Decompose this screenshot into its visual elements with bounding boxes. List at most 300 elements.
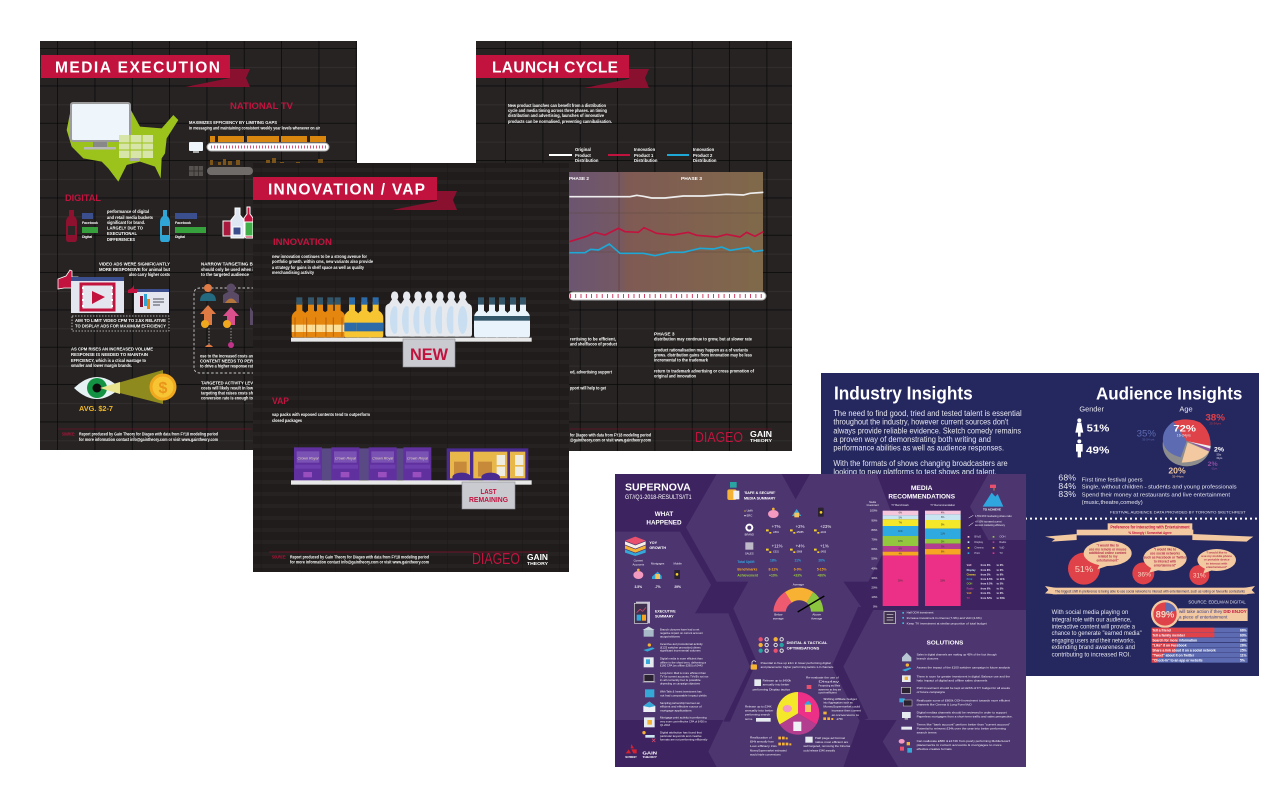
logo: gain theory: GAIN (642, 751, 657, 757)
pie chart annotations: Shifting Affiliate budget (823, 697, 857, 701)
bubble: 31 percent: to interact with (1206, 561, 1227, 565)
media change table: to 6% (997, 569, 1004, 572)
media summary table: +23% (820, 524, 831, 529)
executive summary list: in all currently but is possible (660, 678, 701, 682)
stacked bar chart: media investment: 5% (941, 541, 944, 543)
media summary table: +10% (769, 574, 778, 578)
text: national tv summary: MAXIMIZES EFFICIENCY BY LIMITING GAPS (189, 120, 277, 125)
pie chart annotations: into Aggregators such as (823, 701, 853, 705)
text: vap body (272, 412, 370, 423)
achieve targets: account marketing efficiency (975, 524, 1006, 527)
text: innovation body: a strategy for gains in shelf space as well as quality (272, 265, 364, 270)
solutions list: of future campaigns (917, 690, 946, 694)
media summary table: +2% (796, 524, 805, 529)
age pie chart: 16-24yrs (1177, 434, 1191, 438)
optimisation callout: and placements: higher performing tactics 1-3 channels (761, 665, 834, 669)
executive summary list: TV for current accounts; TVs/Ev not run (660, 675, 709, 679)
chart legend: Product 1 (634, 153, 654, 158)
bar chart: actions taken: Share a link about it on a social network (1152, 649, 1216, 653)
ribbon: preference heading: % Strongly / Somewhat Agree (1128, 530, 1172, 535)
ribbon: biggest shift statement (1045, 586, 1255, 594)
new tag: NEW (410, 345, 449, 364)
audience stats: Single, without children - students and young professionals (1082, 485, 1237, 491)
icon: yoy stack (625, 537, 646, 556)
pie chart annotations: Display (818, 680, 841, 684)
text: industry body: a proven way of demonstrating both writing and (833, 435, 991, 444)
heading: what happened: HAPPENED (646, 520, 682, 527)
stacked bar chart: media investment: 10% (898, 541, 903, 543)
icon: eye and coin (74, 370, 176, 404)
media change table: OOH (967, 583, 973, 586)
achieve targets: +8-10% increased current (975, 521, 1002, 524)
gauge chart: Average (811, 617, 823, 621)
logo: gain theory: THEORY (527, 561, 549, 567)
achieve targets: 1.5% ROI marketing share ratio (975, 515, 1012, 518)
executive summary list: Branch closures have had a net (660, 628, 700, 632)
phase text columns: product rationalisation may happen as a of variants (654, 348, 748, 352)
panel: launch cycle (476, 41, 792, 451)
heading: executive summary: EXECUTIVE (655, 609, 676, 613)
text: industry body: The need to find good, tried and tested talent is essential (833, 409, 1022, 418)
text: industry body: always provide reliable evidence. Sketch comedy remains (833, 426, 1021, 435)
executive summary list: Digital attribution has found that (660, 731, 702, 735)
age pie chart: 2% (1214, 448, 1225, 454)
yoy growth: 3.5% (635, 585, 642, 589)
icon: display ad card (128, 285, 169, 313)
bubble: 36 percent: "I would like to (1154, 548, 1176, 552)
pie chart annotations (745, 676, 861, 757)
audience stats: First time festival goers (1082, 477, 1143, 483)
icon: digital optimisation dots (759, 638, 783, 652)
media summary table: ERC (747, 513, 752, 517)
age pie chart: 38% (1205, 413, 1226, 423)
bubble: 36 percent: use social networks (1150, 552, 1180, 556)
executive summary list (642, 627, 709, 742)
executive summary list: significant incremental volumes (660, 649, 701, 653)
pie chart annotations: Re-evaluate the use of (806, 676, 839, 680)
stacked bar chart: media investment: 4% (899, 554, 902, 556)
executive summary list: formats are not performing efficiently (660, 738, 708, 742)
text: innovation body: merchandising activity (272, 270, 314, 275)
callout: aim to limit video cpm: TO DISPLAY ADS FOR MAXIMUM EFFICIENCY (75, 324, 167, 328)
line chart: distribution over phases: PHASE 2 (569, 176, 589, 181)
bubble: 36 percent: to interact with (1154, 560, 1176, 564)
stacked bar chart: media investment: 5% (941, 546, 944, 548)
media summary table: £331 (773, 550, 779, 553)
purple packs: Crown Royal (298, 456, 319, 460)
phase text columns: ed, advertising support (570, 370, 612, 374)
gauge chart (773, 582, 824, 621)
text: launch intro (508, 103, 612, 124)
bubble: 31 percent: 31% (1193, 572, 1206, 579)
heading: media recommendations (888, 485, 955, 500)
stacked bar chart: media investment: 53% (940, 581, 945, 583)
pie chart annotations: £84k annually from (750, 740, 775, 744)
heading: vap: VAP (272, 396, 289, 406)
logo: gain theory (527, 553, 549, 567)
source note: FESTIVAL AUDIENCE DATA PROVIDED BY TORONTO SKETCHFEST (1110, 509, 1246, 514)
background hexagons (615, 474, 1026, 767)
media summary table: Uplift (747, 509, 753, 513)
media change table: TV (967, 597, 970, 600)
audience stats: 83% (1058, 489, 1076, 499)
heading: digital and tactical optimisations: OPTIMISATIONS (787, 646, 820, 650)
heading: what happened (646, 511, 682, 527)
icon and heading: to achieve: TO ACHIEVE (983, 508, 1001, 512)
yoy growth (633, 541, 682, 589)
pie chart annotations: performing search (745, 713, 771, 717)
media summary table: Total Uplift (737, 560, 755, 564)
text: digital performance: DIFFERENCES (107, 237, 135, 242)
heading: media recommendations: MEDIA (911, 485, 933, 492)
bar chart: actions taken: Tell a friend (1152, 628, 1171, 632)
bubble: 31 percent: use my mobile phone (1201, 554, 1232, 558)
age pie chart: 2% (1208, 462, 1218, 468)
bubble: 36 percent (1132, 546, 1187, 584)
heading: industry insights: Industry Insights (834, 382, 973, 403)
executive summary list: acquisitions (660, 634, 681, 638)
pie chart annotations: Release up to £34K (745, 704, 772, 708)
89 percent callout: a piece of entertainment (1179, 614, 1228, 619)
icon: bottle cluster (223, 207, 253, 238)
yoy growth: 29% (674, 585, 681, 589)
age pie chart: 64yrs (1217, 457, 1223, 460)
solutions list: Terms like "bank account" perform better than "current account" (917, 723, 1010, 727)
heading: digital: DIGITAL (65, 193, 101, 204)
media summary table: £102 (821, 531, 827, 534)
chart legend: Original (575, 147, 591, 152)
ribbon: launch cycle heading (476, 55, 649, 88)
callout: aim to limit video cpm: AIM TO LIMIT VIDEO CPM TO 2.5X RELATIVE (75, 318, 166, 323)
launch footer and logos: THEORY (750, 438, 773, 444)
media change table: VoD (967, 592, 972, 595)
media summary table: £591 (773, 531, 779, 534)
media summary table: 20% (818, 559, 825, 563)
stacked bar chart: media investment: 9% (941, 524, 944, 526)
pie chart annotations: terms (745, 717, 753, 721)
audience stats: 68% (1058, 473, 1076, 483)
pie chart annotations: native most efficient are (815, 740, 849, 744)
stacked bar chart: media investment: Media (869, 501, 877, 504)
ribbon: media execution heading (41, 55, 250, 87)
icon: safe and secure (727, 482, 739, 500)
panel: media execution (40, 41, 357, 450)
media legend: Cinema (974, 546, 984, 550)
bar chart: actions taken: 28% (1240, 638, 1247, 642)
bar chart: actions taken: 25% (1240, 649, 1247, 653)
stacked bar chart: media investment: 6% (899, 549, 902, 551)
targeting text: costs will likely result in low (201, 386, 254, 390)
media change table: to 3% (997, 564, 1004, 567)
audience stats: Spend their money at restaurants and live entertainment (1082, 493, 1230, 499)
text: industry body: throughout the industry, however current sources don't (833, 418, 1009, 427)
media summary table: +1% (820, 543, 829, 548)
ribbon: launch cycle heading: LAUNCH CYCLE (492, 60, 618, 76)
solutions list: effective creative formats (917, 747, 952, 751)
89 percent callout: 89% (1156, 609, 1175, 619)
executive summary list: (£125 switcher promotion) drives (660, 645, 701, 649)
solutions list: There is room for greater investment in digital. Balance use and the (917, 674, 1011, 678)
targeting text: targeting that raises costs sh (201, 390, 253, 396)
pie chart annotations: MoneySupermarket could (823, 704, 861, 708)
chart legend: Distribution (693, 158, 717, 163)
stacked bar chart: media investment: 60% (871, 547, 878, 551)
solutions list: PoD investment should be kept at LESS of FY budget for all weeks (917, 686, 1011, 690)
ribbon: biggest shift statement: The biggest shift in preference is being able to use social networks to interact with entertainment, such as voting on favourite contestants (1055, 589, 1245, 593)
media summary table: 6-9% (794, 567, 802, 571)
gender stats: 51% (1087, 424, 1109, 435)
media change table: to 53% (997, 597, 1005, 600)
executive summary list: £160 CPA (vs offline £290) of £443 (660, 664, 703, 668)
pie chart annotations: could release £34K annually (803, 748, 836, 752)
stacked bar chart: media investment: TY Benchmark (891, 503, 909, 507)
phase text columns: distribution may continue to grow, but at slower rate (654, 336, 752, 342)
media summary table: +33% (793, 574, 802, 578)
source footer (269, 552, 548, 564)
solutions list: Reallocate some of £800k OOH investment towards more efficient (917, 698, 1010, 702)
text: social media body: extending brand awareness and (1052, 644, 1135, 651)
stacked bar chart: media investment: 4% (941, 512, 944, 514)
media summary table: £453 (821, 550, 827, 553)
text: digital performance: and retail media buckets (107, 215, 154, 220)
text: industry body (833, 409, 1022, 477)
media summary table (737, 508, 831, 578)
narrow targeting text: to the targeted audience (201, 272, 249, 277)
text: launch intro: New product launches can benefit from a distribution (508, 103, 606, 108)
solutions list: Potential to reinvest £34k over the year into better performing (917, 727, 1007, 731)
pie chart annotations: increase then current (832, 709, 861, 713)
executive summary list: Digital media is more efficient than (660, 657, 703, 661)
media summary table: SALES (745, 551, 754, 555)
text: social media body: integral role with our audience, (1052, 616, 1132, 623)
targeting text: ose to the increased costs an (200, 354, 253, 358)
left column (625, 483, 709, 759)
optimisation callout: Potential to free up £1m in lower performing digital (761, 661, 831, 665)
media change table: Cinema (967, 574, 976, 577)
phase text columns: return to trademark advertising or cross promotion of (654, 368, 754, 374)
text: launch intro: cycle and media timing across three phases. an timing (508, 108, 607, 113)
source footer: SOURCE: (62, 432, 75, 436)
yoy growth: Mobile (673, 561, 682, 565)
phase text columns: pport will help to get (570, 386, 606, 390)
media change table: VoD (967, 564, 972, 567)
solutions list: Digital mediaa channels should be reviewed in order to support (917, 711, 1007, 715)
text: social media body: With social media playing on (1052, 609, 1129, 616)
gender stats: Gender (1079, 405, 1105, 414)
text: cpm rises: AS CPM RISES AN INCREASED VOLUME (71, 346, 153, 352)
heading: audience insights: Audience Insights (1096, 383, 1242, 403)
source footer: SOURCE: (272, 554, 286, 560)
purple packs: Crown Royal (407, 456, 428, 460)
89 percent callout: will take action if they (1179, 609, 1223, 614)
age pie chart: 65yrs (1212, 467, 1218, 470)
pie chart annotations: Half page ad format (815, 736, 845, 740)
media change table: from 9.5% (981, 583, 993, 586)
bubble: 31 percent (1189, 549, 1236, 585)
targeting text: to drive a higher response rat (200, 364, 253, 368)
phase text columns: rertising to be efficient, (570, 336, 616, 342)
chart legend: Innovation (634, 147, 656, 152)
logo: natwest: NATWEST (625, 756, 637, 759)
media legend: TV (999, 551, 1003, 555)
phase text columns: grows. distribution gains from innovation may be less (654, 352, 752, 358)
bar chart: actions taken (1152, 628, 1248, 663)
pie chart annotations: awareness as they are (818, 687, 841, 691)
digital comparison: blue bottle: Digital (175, 235, 185, 239)
text: cpm rises: smaller and lower margin brands. (71, 363, 132, 368)
pie chart annotations: Reallocation of (750, 735, 772, 739)
executive summary list: Incentive-led promotional activity (660, 642, 703, 646)
bar chart: actions taken: "Like" it on Facebook (1152, 644, 1187, 648)
audience stats: 84% (1058, 481, 1076, 491)
age pie chart: 55to (1217, 454, 1222, 457)
solutions list (899, 653, 1013, 753)
media summary table: £668 (797, 550, 803, 553)
launch footer and logos (570, 429, 773, 446)
stacked bar chart: media investment: 20% (871, 586, 878, 590)
bubble: 51 percent: 51% (1075, 564, 1093, 574)
stacked bar chart: media investment: 90% (871, 518, 878, 522)
phase text columns: and shelf/scoo of product (570, 342, 617, 346)
gold gift boxes (447, 448, 528, 482)
source footer (58, 429, 252, 442)
executive summary list: particular keywords and creative (660, 734, 702, 738)
media summary table: 18% (770, 559, 777, 563)
bar chart: actions taken: 11% (1240, 654, 1247, 658)
text: launch intro: distribution and advertising, launches of innovative (508, 113, 604, 118)
media legend: OOH (999, 535, 1005, 539)
launch footer and logos: DIAGEO (695, 429, 743, 446)
pie chart annotations: Low efficacy into (750, 744, 777, 748)
heading: executive summary: SUMMARY (655, 615, 674, 619)
bubble: 36 percent: entertainment" (1154, 564, 1177, 568)
bar chart: actions taken: Search for more information (1152, 638, 1197, 642)
media plan bullets: Keep TV investment at similar proportion of total budget (907, 621, 987, 625)
text: video ads: MORE RESPONSIVE for animal but (99, 267, 170, 272)
heading: safe and secure media summary: 'SAFE & SECURE' (744, 491, 776, 495)
media legend (968, 535, 1007, 555)
pie chart annotations: Prospecting and Meta (818, 683, 840, 687)
title: supernova: GT//Q1-2018-RESULTS//T1 (625, 494, 692, 501)
bar chart: actions taken: 5% (1240, 659, 1245, 663)
media change table: to 5% (997, 583, 1004, 586)
source footer: Report produced by Gain Theory for Diageo with data from FY18 modeling period (79, 432, 218, 436)
media plan bullets: Increase investment in cinema (7-9%) and VoD (4-6%) (907, 616, 982, 620)
media change table: to 6% (997, 592, 1004, 595)
stacked bar chart: media investment: TY Recommendation (930, 503, 956, 507)
executive summary list: Mortgage print activity is performing (660, 716, 707, 720)
panel: innovation and vap (253, 163, 569, 572)
tv flighting chart (189, 136, 329, 176)
gauge chart: average (773, 617, 784, 621)
media legend: VoD (999, 546, 1004, 550)
bubble: 51 percent: "I would like to (1096, 544, 1119, 548)
solutions list: Paperless mortgages from a short-term traffic and sales perspective. (917, 715, 1013, 719)
heading: what happened: WHAT (655, 511, 673, 518)
pie chart annotations: at conversions to (832, 713, 860, 717)
yoy growth: Accounts (633, 562, 645, 566)
social preference section (1045, 523, 1255, 663)
stacked bar chart: media investment: 11% (898, 531, 903, 533)
text: innovation body (272, 254, 373, 275)
targeting diagram (194, 284, 256, 373)
pie chart annotations: performing Display tactics (753, 687, 791, 691)
text: industry body: looking to new platforms to test shows and talent. (833, 468, 997, 477)
text: digital performance: LARGELY DUE TO (107, 226, 144, 230)
last remaining tag (462, 482, 515, 509)
text: digital performance: EXECUTIONAL (107, 231, 137, 236)
new tag (403, 339, 455, 367)
label: average cpm: AVG. $2-7 (79, 404, 113, 413)
media summary table: Achievement (737, 574, 759, 578)
media summary table: 8-12% (769, 567, 778, 571)
orange bottles (292, 297, 345, 337)
stacked bar chart: media investment: Investment (867, 504, 879, 507)
digital comparison: red bottle: Digital (82, 235, 92, 239)
panel: supernova (615, 474, 1026, 767)
text: national tv summary (189, 120, 320, 130)
stacked bar chart: media investment: 30% (871, 576, 878, 580)
pie chart annotations: annually into better (745, 708, 773, 712)
media change table: to 9% (997, 574, 1004, 577)
media legend: Radio (999, 540, 1007, 544)
yoy growth: -7% (655, 585, 661, 589)
heading: innovation: INNOVATION (273, 237, 332, 247)
stacked bar chart: media investment: 80% (871, 528, 878, 532)
media summary table: 11% (794, 559, 801, 563)
chart legend: Innovation (693, 147, 715, 152)
text: digital performance (107, 209, 154, 242)
line chart: distribution over phases (569, 172, 766, 300)
89 percent callout: DID ENJOY (1223, 609, 1247, 614)
heading: digital and tactical optimisations: DIGITAL & TACTICAL (787, 641, 828, 645)
text: cpm rises (71, 346, 153, 368)
media summary table: +7% (772, 524, 781, 529)
media summary table: 5-15% (817, 567, 827, 571)
stacked bar chart: media investment: 100% (870, 509, 878, 513)
gender stats: 49% (1086, 445, 1109, 456)
bubble: 31 percent: "I would like to (1206, 550, 1227, 554)
water bottles (385, 291, 472, 337)
yoy growth: YOY (649, 541, 658, 545)
phase text columns: original and innovation (654, 374, 696, 378)
launch footer and logos: GAIN (750, 430, 772, 439)
yoy growth: GROWTH (649, 546, 666, 550)
stacked bar chart: media investment: 0% (873, 605, 878, 609)
bar chart: actions taken: 60% (1240, 633, 1247, 637)
gauge chart: Below (774, 613, 783, 617)
stacked bar chart: media investment: 11% (940, 534, 945, 536)
text: national tv summary: in messaging and maintaining consistent weekly year levels whenever on air (189, 126, 320, 130)
text: industry body: With the formats of shows changing broadcasters are (833, 459, 1008, 468)
text: innovation body: portfolio growth. within cms, new variants also provide (272, 259, 373, 264)
phase text columns: incremental to the trademark (654, 358, 708, 362)
stacked bar chart: media investment: 6% (941, 552, 944, 554)
optimisation callout (751, 661, 834, 670)
media change table: from 8% (981, 569, 991, 572)
media change table: from 6% (981, 587, 991, 590)
age pie chart: 35-54 yrs (1142, 438, 1155, 442)
callout: aim to limit video cpm (72, 316, 169, 331)
gauge chart: Average (793, 582, 804, 586)
narrow targeting text: should only be used when in (201, 267, 256, 272)
media summary table: Benchmarks (737, 567, 757, 571)
pie chart annotations: well targeted, removing the Cinema (803, 744, 851, 748)
media plan bullets (902, 611, 987, 625)
heading: solutions: SOLUTIONS (927, 640, 964, 646)
executive summary list: Sampling partnership has been an (660, 701, 701, 705)
ribbon: innovation vap heading: INNOVATION / VAP (268, 182, 425, 198)
